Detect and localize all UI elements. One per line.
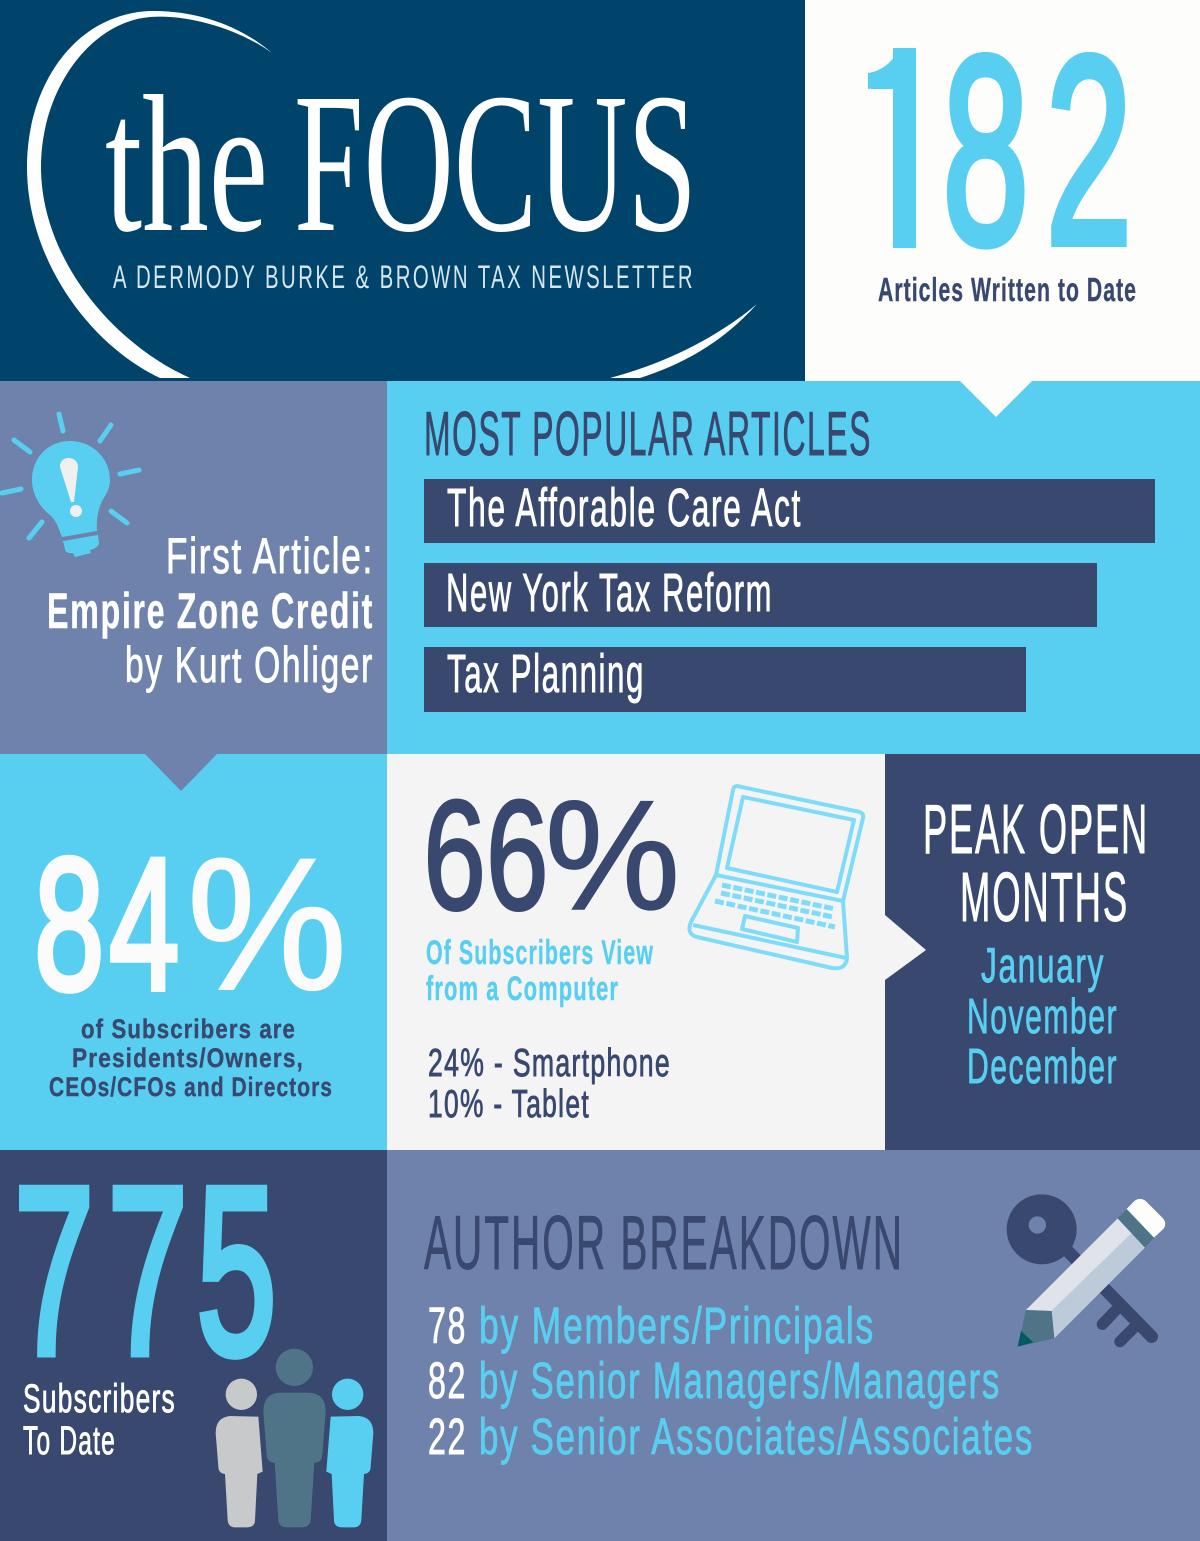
row: members and principals (428, 1297, 875, 1354)
bar: Tax Planning: Tax Planning (447, 644, 645, 704)
logo wordmark: the (105, 56, 268, 273)
caption: view from a computer: from a Computer (426, 970, 619, 1008)
stat: 84%: 84 (34, 819, 179, 1029)
logo wordmark: FOCUS (294, 53, 697, 274)
panel: subscriber roles (0, 754, 387, 1150)
text: first article (47, 528, 374, 693)
panel: header logo (0, 0, 805, 381)
icon: key and pencil (1007, 1194, 1165, 1347)
text: first article: Empire Zone Credit (47, 583, 374, 639)
panel: peak open months (885, 754, 1200, 1150)
panel: most popular articles (387, 381, 1200, 754)
icon: laptop (689, 786, 863, 968)
row: senior managers and managers (428, 1352, 1001, 1409)
stat: 84% (34, 819, 347, 1029)
arrow: pointer from first article (145, 754, 217, 791)
arrow: pointer from devices (885, 915, 926, 980)
heading: peak open months (923, 790, 1149, 936)
stat: 84%: % (187, 819, 347, 1029)
caption: subscriber roles: CEOs/CFOs and Directors (49, 1072, 333, 1102)
logo swoosh arc (27, 11, 757, 378)
row: members and principals: 78 (428, 1297, 467, 1354)
panel: first article (0, 381, 387, 754)
text: other devices: 24% - Smartphone (428, 1042, 671, 1085)
bar: The Afforable Care Act: The Afforable Care Act (447, 478, 802, 538)
arrow: pointer from articles count (960, 381, 1032, 417)
caption: subscriber roles: of Subscribers are (81, 1014, 296, 1044)
text: first article: by Kurt Ohliger (125, 637, 374, 693)
panel: author breakdown (387, 1150, 1200, 1541)
list: months: January (981, 939, 1105, 993)
caption: view from a computer (426, 934, 654, 1008)
list: months (967, 939, 1118, 1094)
bar: New York Tax Reform: New York Tax Reform (446, 563, 773, 623)
panel: articles count (805, 0, 1200, 381)
caption: subscribers to date: To Date (23, 1419, 116, 1463)
stat: 182: 182 (858, 2, 1132, 300)
caption: subscribers to date: Subscribers (23, 1377, 176, 1421)
stat: 66%: 66 (423, 768, 548, 942)
row: senior associates and associates: 22 (428, 1408, 467, 1465)
caption: subscriber roles: Presidents/Owners, (72, 1043, 304, 1073)
icon: people (216, 1349, 373, 1527)
panel: subscribers to date (0, 1137, 387, 1541)
bar: Tax Planning (424, 644, 1026, 712)
stat: 775: 775 (14, 1137, 276, 1404)
caption: subscribers to date (23, 1377, 176, 1463)
stat: 66% (423, 768, 680, 943)
logo wordmark (105, 53, 697, 274)
stat: 66%: % (545, 769, 680, 943)
text: other devices: 10% - Tablet (428, 1083, 590, 1126)
text: other devices (428, 1042, 671, 1126)
caption: subscriber roles (49, 1014, 333, 1102)
caption: view from a computer: Of Subscribers View (426, 934, 654, 972)
text: first article: First Article: (166, 528, 374, 584)
logo tagline: A DERMODY BURKE & BROWN TAX NEWSLETTER (113, 259, 695, 295)
row: members and principals: by Members/Principals (479, 1297, 875, 1354)
row: senior managers and managers: 82 (428, 1352, 467, 1409)
panel: devices (387, 754, 885, 1150)
icon: light bulb (2, 414, 139, 557)
